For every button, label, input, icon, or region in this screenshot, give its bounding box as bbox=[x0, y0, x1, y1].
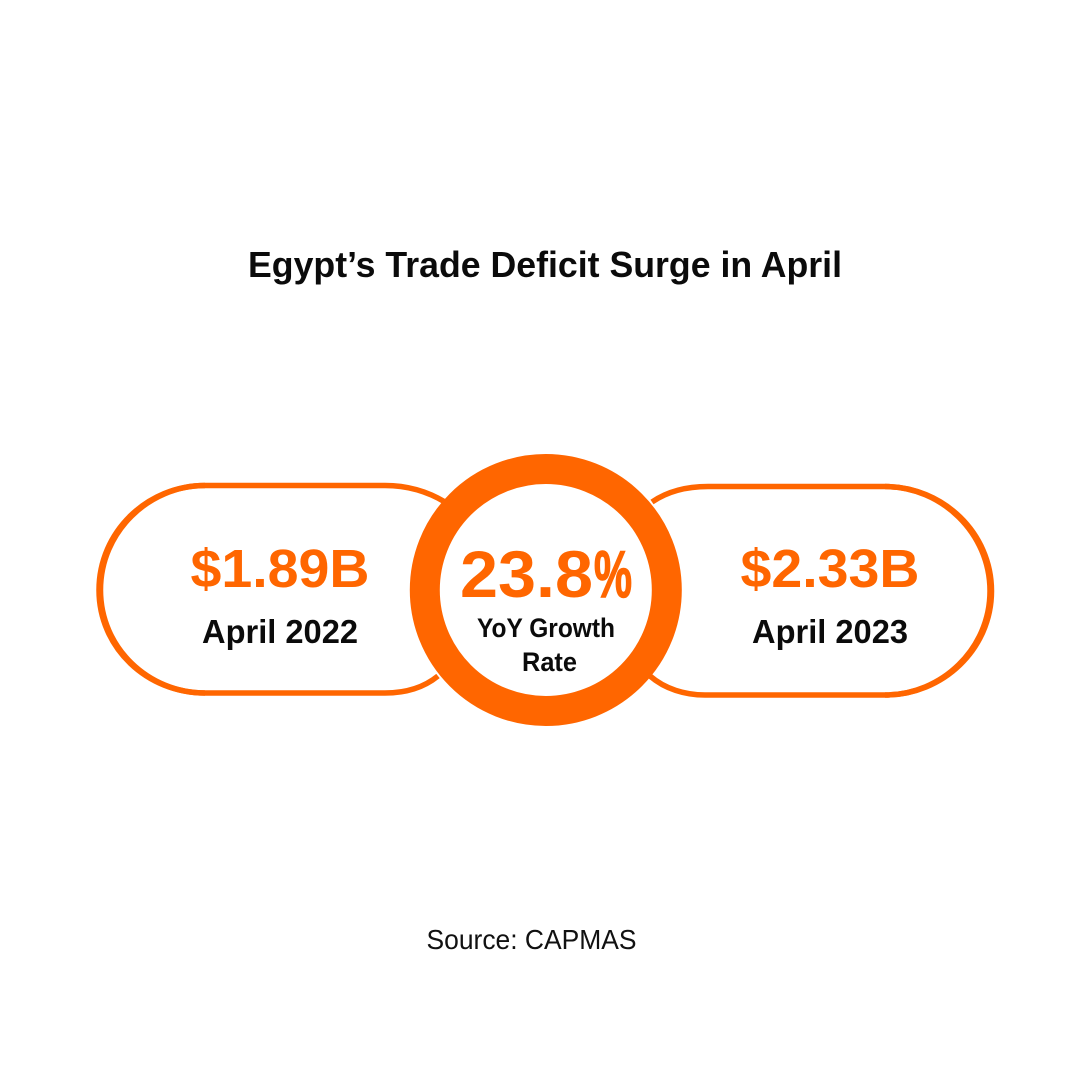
title: Egypt’s Trade Deficit Surge in April bbox=[248, 244, 842, 285]
label 2022: April 2022 bbox=[202, 613, 358, 650]
pill outline left bbox=[99, 486, 445, 693]
panel: YoY growth ring bbox=[425, 469, 667, 711]
pill outline right bbox=[650, 486, 992, 695]
panel: April 2023 bbox=[650, 486, 992, 695]
source: Source: CAPMAS bbox=[426, 924, 636, 955]
ring bbox=[425, 469, 667, 711]
growth value: % bbox=[594, 537, 632, 611]
growth label line 2: Rate bbox=[522, 647, 577, 677]
label 2023: April 2023 bbox=[752, 613, 908, 650]
panel: April 2022 bbox=[99, 486, 445, 693]
value 2022: $1.89B bbox=[190, 539, 370, 599]
value 2023: $2.33B bbox=[740, 539, 920, 599]
growth value: 23.8 bbox=[460, 537, 593, 611]
growth label: YoY Growth bbox=[477, 613, 615, 643]
